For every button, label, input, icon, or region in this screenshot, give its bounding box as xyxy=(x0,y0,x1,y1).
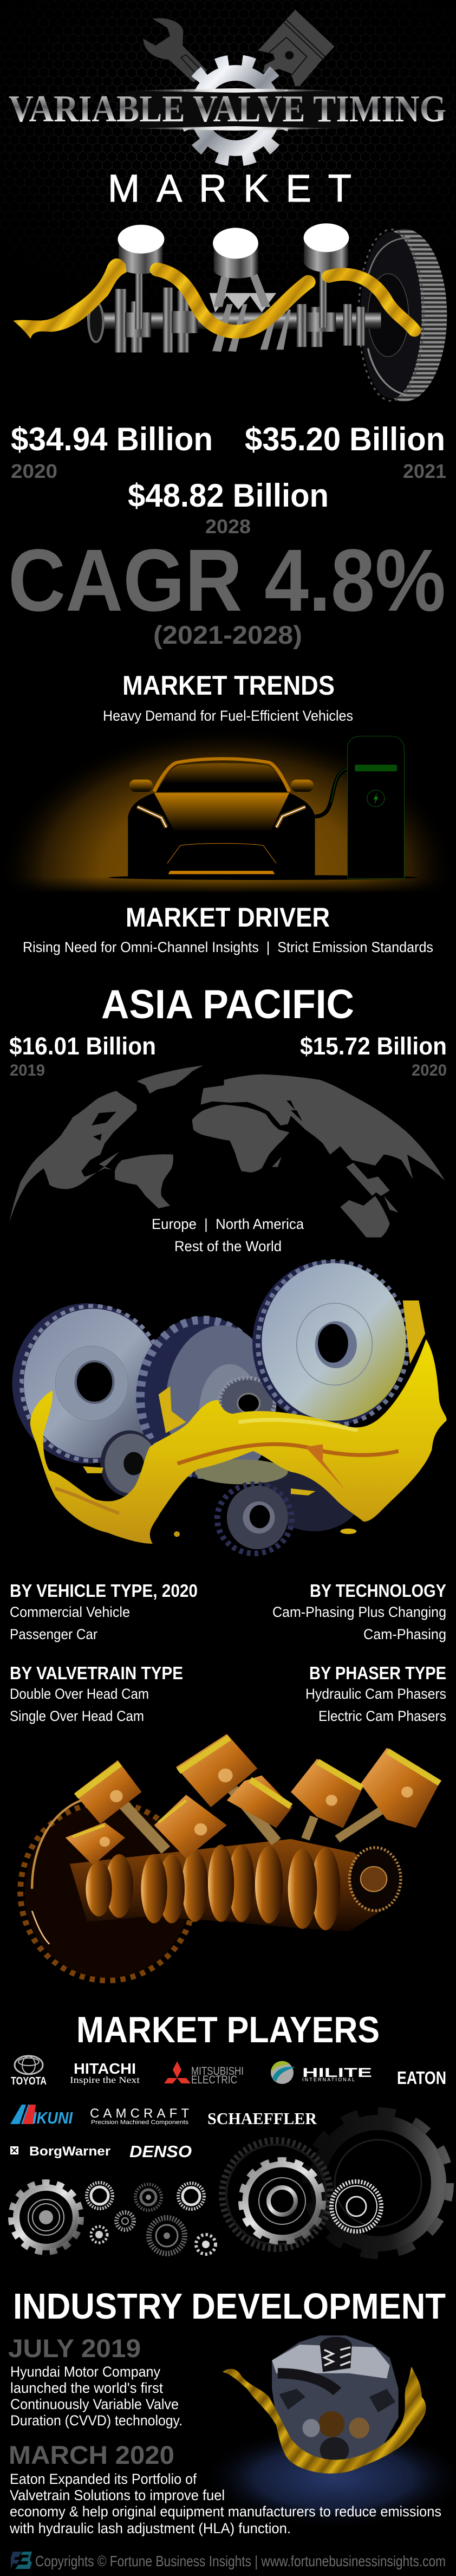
gear: white fine tooth xyxy=(331,2182,381,2231)
logo: Schaeffler: SCHAEFFLER xyxy=(207,2109,317,2128)
illustration: camshaft engine with oil xyxy=(13,223,447,402)
company logos xyxy=(10,2056,446,2161)
segment item: Double Over Head Cam xyxy=(10,1686,149,1702)
segment item: Cam-Phasing xyxy=(363,1626,446,1642)
logo: Mikuni: IKUNI xyxy=(32,2108,73,2127)
logo: Hilite International: INTERNATIONAL xyxy=(302,2077,355,2082)
segment item: Commercial Vehicle xyxy=(10,1604,130,1620)
Africa xyxy=(192,1105,289,1173)
gear: mid grey xyxy=(149,2218,185,2254)
year 2020: 2020 xyxy=(412,1062,447,1079)
gear: silver ring xyxy=(242,2160,323,2242)
piston pins xyxy=(100,1769,413,1847)
logo: Hitachi: HITACHI xyxy=(74,2060,136,2077)
market size figures xyxy=(11,421,446,538)
Hudson Bay and lakes xyxy=(92,1081,302,1141)
logo: Hilite International: HILITE xyxy=(302,2066,372,2080)
icon: gear wrench and piston emblem xyxy=(125,10,346,161)
date: JULY 2019 xyxy=(8,2334,141,2363)
pistons xyxy=(118,223,349,329)
gear one xyxy=(12,1303,165,1464)
segment: valvetrain type xyxy=(10,1663,183,1724)
description line: launched the world's first xyxy=(10,2380,163,2396)
header hex texture xyxy=(0,0,456,314)
logo: Camcraft: CAMCRAFT xyxy=(90,2106,189,2121)
heading: market driver: MARKET DRIVER xyxy=(126,902,330,933)
piston rings xyxy=(73,1738,440,1837)
logo: Denso: DENSO xyxy=(129,2142,192,2161)
Greenland xyxy=(136,1065,204,1093)
illustration: amber translucent engine xyxy=(21,1734,441,1980)
segment item: Hydraulic Cam Phasers xyxy=(305,1686,446,1702)
stat: 2020 value: $34.94 Billion xyxy=(11,421,213,457)
logo: Mitsubishi Electric xyxy=(164,2061,244,2086)
camshaft xyxy=(87,288,381,353)
engine block xyxy=(272,2335,399,2467)
segment heading: BY VEHICLE TYPE, 2020 xyxy=(10,1581,198,1601)
segment item: Single Over Head Cam xyxy=(10,1708,144,1724)
description line: Hyundai Motor Company xyxy=(10,2364,160,2380)
heading: market players: MARKET PLAYERS xyxy=(76,2009,380,2050)
South America xyxy=(115,1154,173,1208)
Madagascar xyxy=(272,1157,282,1167)
Eurasia xyxy=(201,1075,445,1181)
illustration: electric car and charger xyxy=(0,726,456,1023)
gear two xyxy=(136,1317,276,1480)
gear: small dot xyxy=(91,2227,107,2243)
date: MARCH 2020 xyxy=(9,2441,174,2469)
regional figures xyxy=(9,1032,447,1079)
logo: Mitsubishi Electric: MITSUBISHI xyxy=(191,2065,244,2077)
ground shadow xyxy=(108,875,418,880)
development: March 2020 xyxy=(9,2441,441,2536)
oil ribbon xyxy=(13,258,414,339)
small gear left xyxy=(100,1431,159,1497)
description line: Duration (CVVD) technology. xyxy=(10,2412,183,2429)
description line: economy & help original equipment manufacturers to reduce emissions xyxy=(10,2503,441,2520)
world map globe xyxy=(9,1065,445,1238)
flywheel xyxy=(21,1800,195,1980)
blue floor glow xyxy=(201,2426,456,2529)
icon: wrench xyxy=(143,18,207,82)
timing gear xyxy=(359,229,447,402)
stat: 2028 value: $48.82 Billion xyxy=(128,477,329,514)
year 2019: 2019 xyxy=(10,1062,45,1079)
small gear bottom xyxy=(217,1484,292,1554)
logo: Mitsubishi Electric: ELECTRIC xyxy=(191,2074,237,2086)
segment: phaser type xyxy=(305,1663,446,1724)
gear: fine dark ring xyxy=(222,2140,330,2249)
description line: Eaton Expanded its Portfolio of xyxy=(10,2471,197,2487)
logo: Camcraft: Precision Machined Components xyxy=(91,2119,189,2126)
other regions xyxy=(152,1216,304,1254)
CAGR period: (2021-2028) xyxy=(153,620,302,649)
large dark gear xyxy=(307,2112,450,2255)
small gear xyxy=(349,1848,401,1911)
stat: 2021 value: $35.20 Billion xyxy=(245,421,445,457)
logo: Hitachi: Inspire the Next xyxy=(70,2075,140,2085)
Southeast Asia xyxy=(346,1163,399,1213)
gear: small dot two xyxy=(196,2235,216,2254)
gear: small white ring two xyxy=(178,2183,204,2209)
pistons xyxy=(66,1734,441,1865)
icon: Fortune Business Insights logo xyxy=(11,2552,32,2569)
segment heading: BY VALVETRAIN TYPE xyxy=(10,1663,183,1683)
title band xyxy=(125,88,346,131)
illustration: steel gears with oil splash xyxy=(12,1260,447,1554)
year 2020: 2020 xyxy=(11,460,57,482)
segment: vehicle type xyxy=(10,1581,198,1642)
North America xyxy=(9,1091,136,1223)
decorative gears cluster xyxy=(11,2112,450,2255)
centre hub gear xyxy=(219,1378,275,1425)
logo: Toyota: TOYOTA xyxy=(11,2075,47,2087)
description line: Continuously Variable Valve xyxy=(10,2396,179,2412)
car xyxy=(128,759,315,878)
oil splash xyxy=(30,1300,447,1544)
logo: Hitachi xyxy=(70,2060,140,2085)
year 2028: 2028 xyxy=(205,515,251,538)
icon: silver gear xyxy=(185,60,286,161)
glow xyxy=(0,726,456,1019)
gear: small white ring xyxy=(87,2183,113,2209)
gear: small grey xyxy=(135,2184,161,2210)
illustration: engine with oil splash xyxy=(201,2335,456,2529)
Australia xyxy=(340,1196,390,1238)
icon: piston xyxy=(258,10,335,86)
regions line one: Europe | North America xyxy=(152,1216,304,1232)
description line: Valvetrain Solutions to improve fuel xyxy=(10,2487,225,2503)
gear three xyxy=(252,1260,408,1426)
gear: tiny xyxy=(116,2212,134,2230)
heading: Asia Pacific: ASIA PACIFIC xyxy=(101,981,354,1027)
market driver text: Rising Need for Omni-Channel Insights | Strict Emission Standards xyxy=(23,939,433,955)
subtitle: market: MARKET xyxy=(108,167,351,210)
crank body xyxy=(70,1839,390,1932)
year 2021: 2021 xyxy=(403,460,446,482)
charger xyxy=(348,736,404,878)
logo: Mikuni xyxy=(10,2105,73,2127)
logo: Hilite International xyxy=(271,2061,372,2084)
connecting rods xyxy=(122,1789,384,1850)
gear: left silver xyxy=(11,2183,81,2252)
segment item: Passenger Car xyxy=(10,1626,97,1642)
description line: with hydraulic lash adjustment (HLA) function. xyxy=(9,2520,291,2536)
regions line two: Rest of the World xyxy=(174,1238,282,1254)
oil splash xyxy=(223,2367,426,2474)
footer xyxy=(11,2552,446,2569)
stat: 2020: $15.72 Billion xyxy=(300,1032,447,1060)
stat: 2019: $16.01 Billion xyxy=(9,1032,156,1060)
segment item: Electric Cam Phasers xyxy=(318,1708,446,1724)
logo: Toyota xyxy=(11,2056,47,2087)
segment: technology xyxy=(272,1581,446,1642)
segment item: Cam-Phasing Plus Changing xyxy=(272,1604,446,1620)
cable xyxy=(315,769,348,817)
development: July 2019 xyxy=(8,2334,183,2429)
heading: market trends: MARKET TRENDS xyxy=(122,670,335,701)
dark gear behind xyxy=(195,1446,365,1531)
market trends text: Heavy Demand for Fuel-Efficient Vehicles xyxy=(103,708,353,724)
logo: BorgWarner: BorgWarner xyxy=(29,2144,110,2159)
